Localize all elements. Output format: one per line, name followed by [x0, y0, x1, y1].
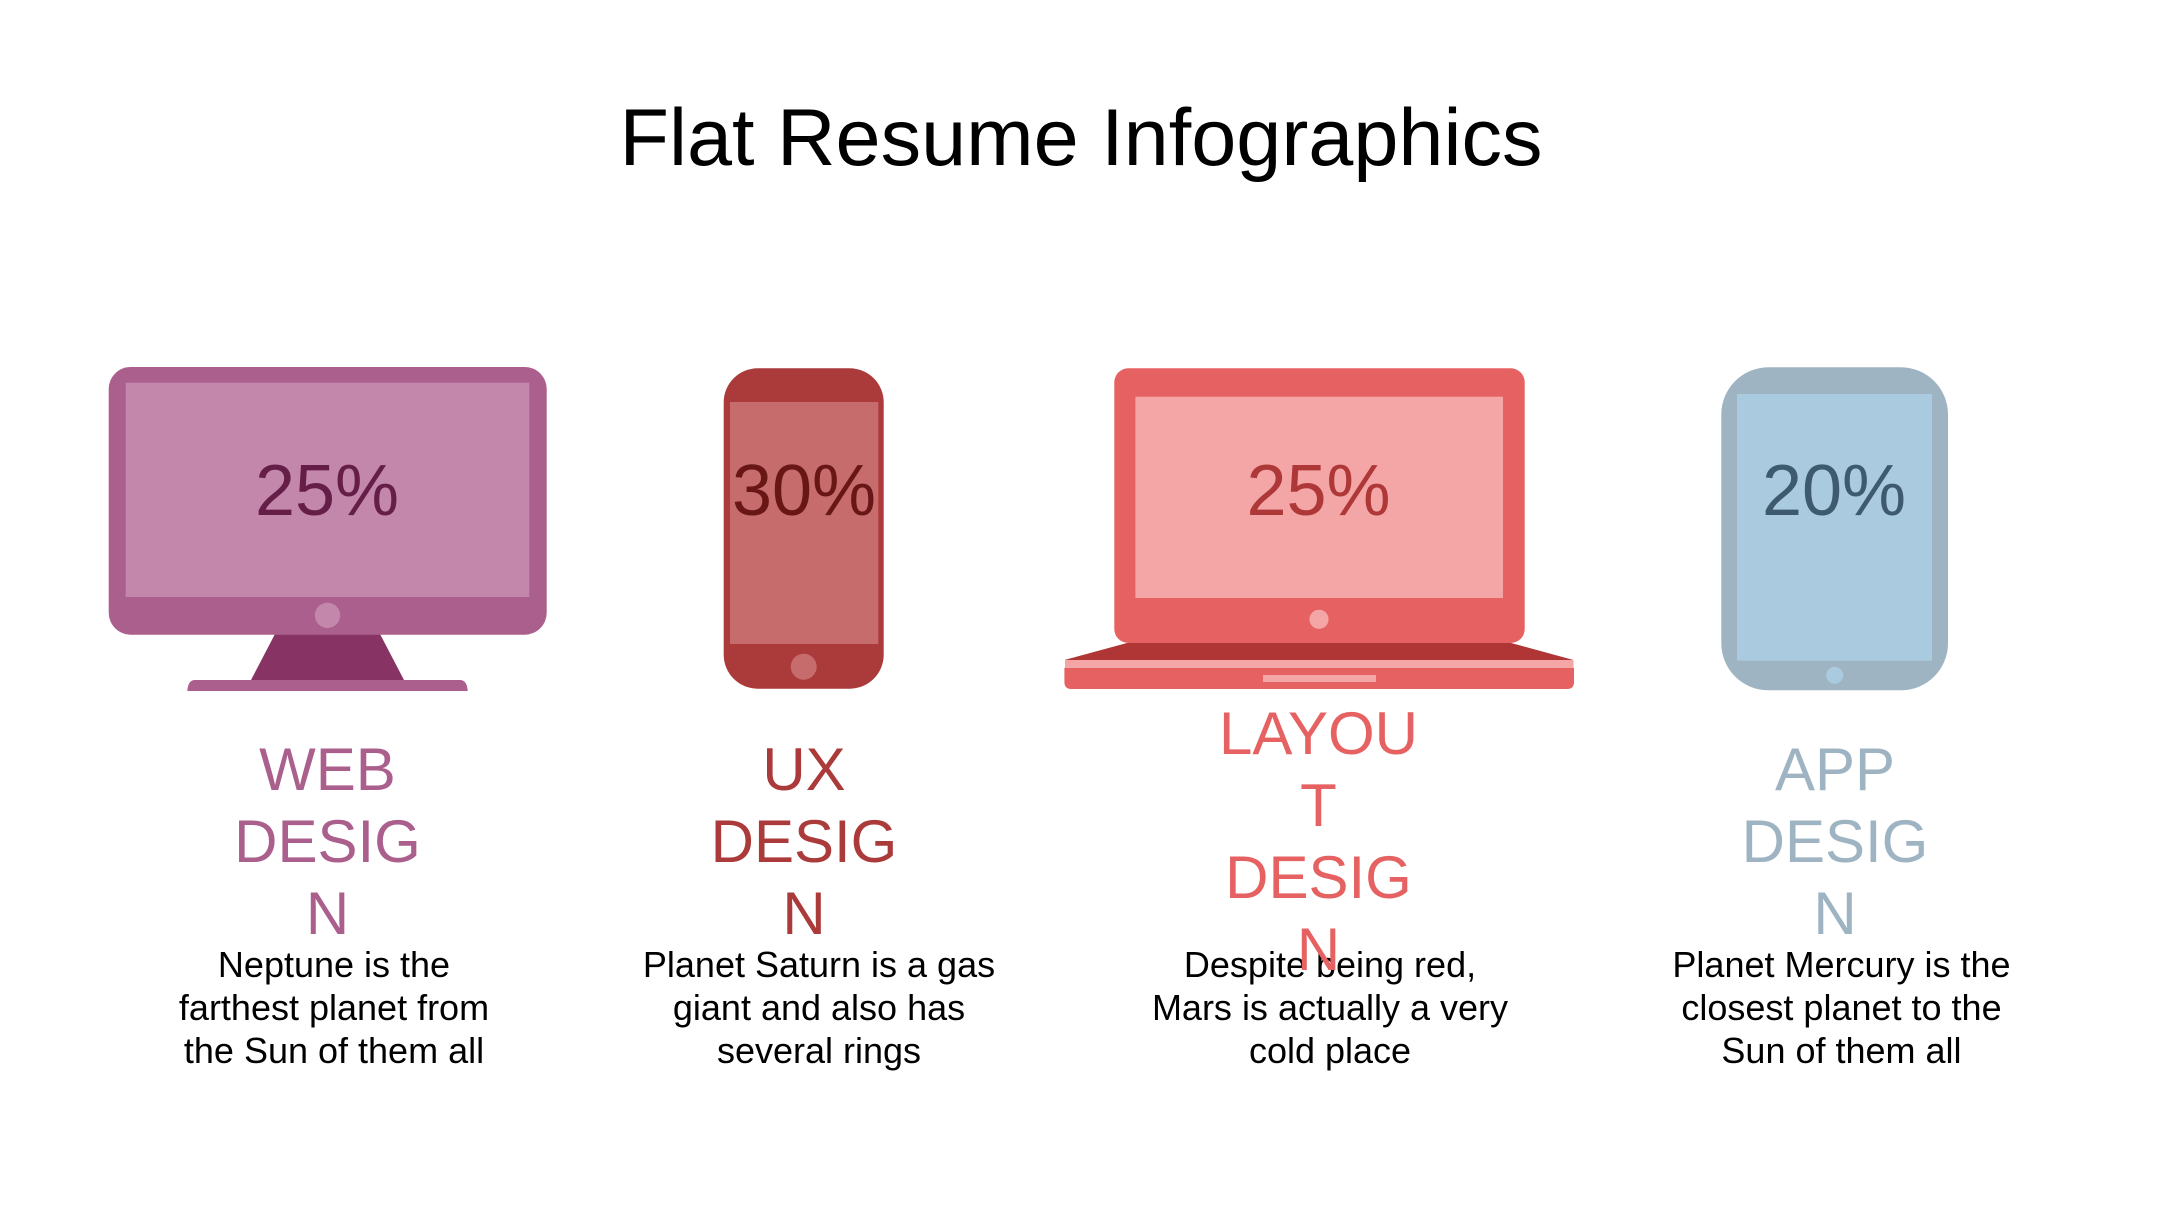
description: app design: Sun of them all — [1721, 1030, 1962, 1071]
percentage: app design: 20% — [1762, 451, 1906, 531]
percentage: layout design: 25% — [1246, 451, 1391, 531]
description: ux design: giant and also has — [673, 987, 965, 1028]
icon: desktop monitor — [109, 367, 547, 691]
label: web design: DESIG — [234, 808, 421, 875]
label: ux design: DESIG — [711, 808, 897, 875]
label: layout design: N — [1297, 916, 1340, 983]
panel: web design — [109, 367, 547, 1071]
label: layout design: DESIG — [1225, 844, 1412, 911]
description: web design: Neptune is the — [218, 944, 450, 985]
label: app design: DESIG — [1742, 808, 1928, 875]
label: layout design: LAYOU — [1219, 700, 1418, 767]
label: app design: N — [1813, 880, 1857, 947]
icon: smartphone — [724, 368, 884, 689]
description: ux design: several rings — [717, 1030, 921, 1071]
description: ux design: Planet Saturn is a gas — [643, 944, 995, 985]
panel: ux design — [643, 368, 995, 1071]
title: Flat Resume Infographics — [620, 93, 1542, 183]
label: layout design: T — [1300, 772, 1337, 839]
description: layout design: Despite being red, — [1184, 944, 1476, 985]
percentage: ux design: 30% — [732, 451, 876, 531]
description: app design: Planet Mercury is the — [1672, 944, 2011, 985]
percentage: web design: 25% — [255, 451, 399, 531]
label: ux design: UX — [762, 736, 846, 803]
panel: app design — [1672, 367, 2011, 1071]
description: layout design: Mars is actually a very — [1152, 987, 1508, 1028]
description: web design: the Sun of them all — [184, 1030, 484, 1071]
panel: layout design — [1064, 368, 1574, 1071]
description: app design: closest planet to the — [1681, 987, 2002, 1028]
description: layout design: cold place — [1249, 1030, 1411, 1071]
label: web design: WEB — [259, 736, 396, 803]
description: web design: farthest planet from — [179, 987, 489, 1028]
label: web design: N — [306, 880, 349, 947]
label: ux design: N — [782, 880, 826, 947]
icon: laptop — [1064, 368, 1574, 689]
label: app design: APP — [1775, 736, 1895, 803]
icon: tablet — [1721, 367, 1948, 690]
